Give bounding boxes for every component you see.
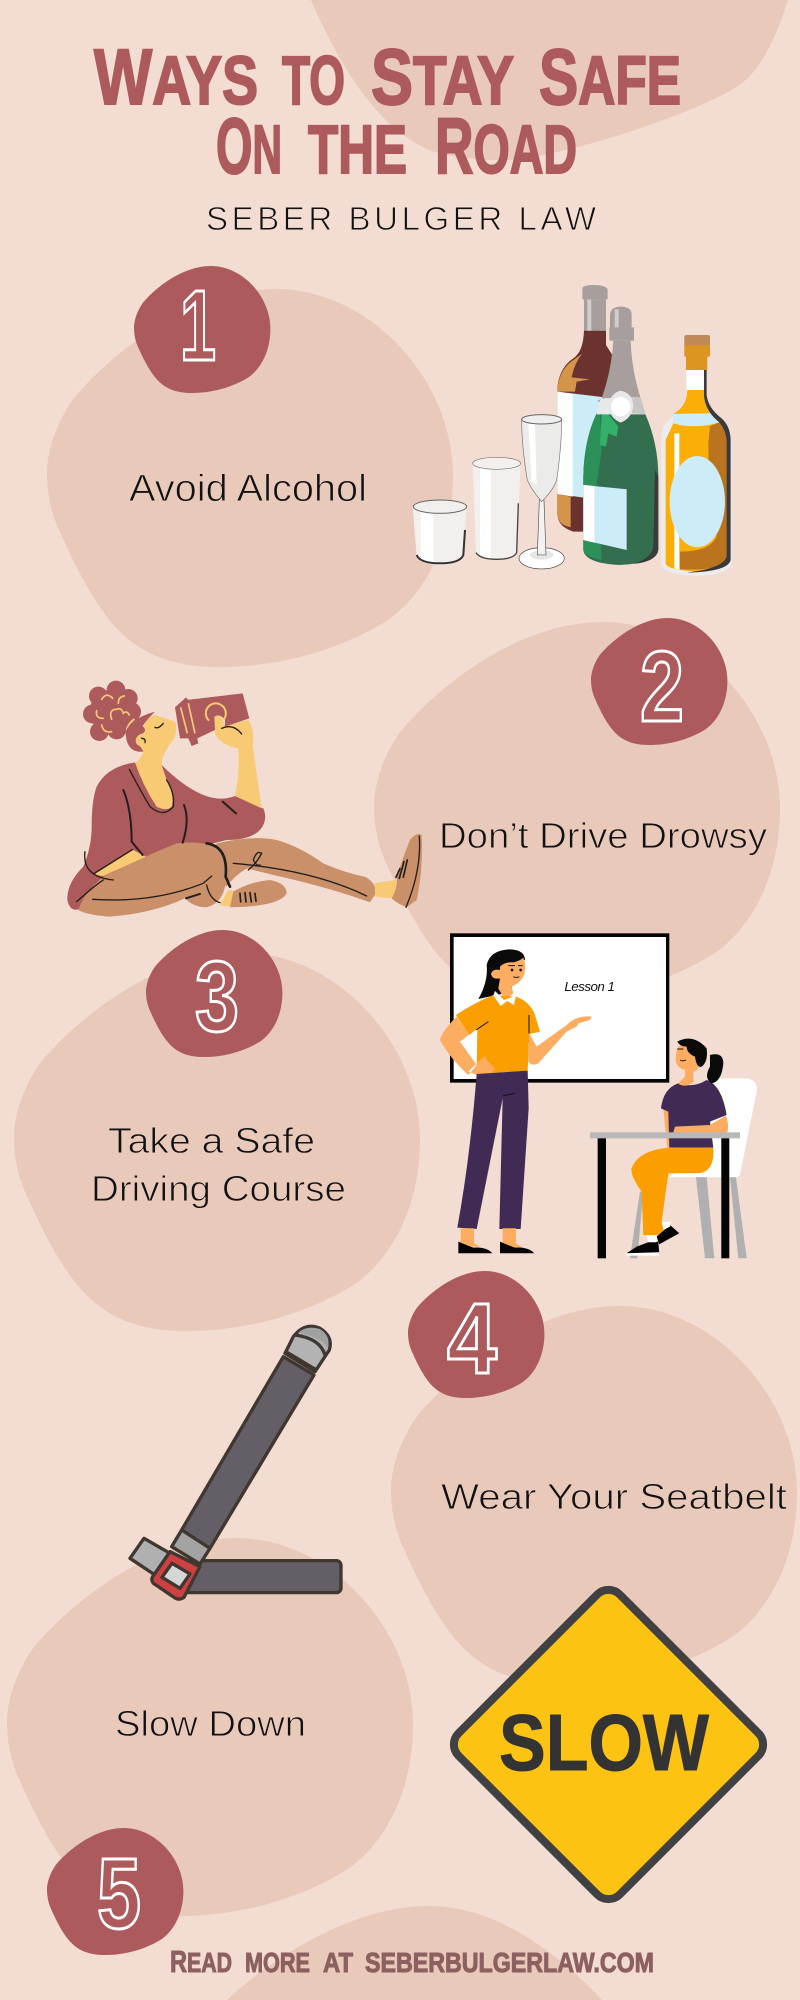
title: THE xyxy=(308,111,407,188)
skin at waist xyxy=(93,850,146,876)
badge: number 1: 1 xyxy=(180,270,216,382)
front hair xyxy=(126,712,155,752)
background blob: step 5 xyxy=(7,1538,413,1916)
arm and hand xyxy=(214,716,262,808)
tall glass xyxy=(473,457,521,560)
shirt xyxy=(67,762,265,910)
subtitle: SEBER BULGER LAW xyxy=(206,200,597,237)
illustration: bottles and glasses xyxy=(413,285,732,576)
wine bottle xyxy=(557,285,613,532)
ear xyxy=(136,735,147,746)
whiteboard xyxy=(450,933,669,1083)
title: WAYS xyxy=(94,32,258,121)
badge: number 2: 2 xyxy=(640,631,684,743)
student xyxy=(625,1039,728,1256)
background blob: step 4 xyxy=(391,1306,797,1684)
whiteboard: Lesson 1 xyxy=(564,979,615,994)
background blob: top xyxy=(311,0,788,160)
illustration: slow road sign xyxy=(447,1583,770,1906)
hair bun xyxy=(83,681,141,741)
metal latch xyxy=(172,1530,210,1564)
amber bottle xyxy=(661,335,732,576)
badge: number 1 xyxy=(134,266,270,393)
coffee cup xyxy=(175,693,249,746)
buckle tab xyxy=(130,1538,170,1575)
badge: number 5 xyxy=(47,1828,183,1955)
illustration: teacher and student in classroom xyxy=(440,933,757,1258)
background blob: step 2 xyxy=(374,622,780,1000)
strap top cap xyxy=(285,1326,330,1372)
footer call to action: MORE xyxy=(245,1947,310,1978)
background blob: step 1 xyxy=(47,289,453,667)
background blob: bottom xyxy=(227,1906,602,2000)
title: SAFE xyxy=(539,32,681,121)
title xyxy=(94,32,681,190)
footer call to action: READ xyxy=(170,1944,232,1979)
teacher xyxy=(440,949,592,1253)
step 2 text: Don’t Drive Drowsy xyxy=(439,815,767,856)
badge: number 4: 4 xyxy=(447,1283,497,1395)
step 4 text: Wear Your Seatbelt xyxy=(441,1476,787,1517)
badge: number 2 xyxy=(591,618,727,745)
footer call to action xyxy=(170,1944,654,1979)
title: TO xyxy=(282,42,345,119)
ankles xyxy=(220,880,397,907)
chair xyxy=(630,1078,757,1258)
short glass xyxy=(413,500,467,565)
lap strap xyxy=(185,1561,341,1593)
footer call to action: AT xyxy=(323,1947,353,1978)
face and chest xyxy=(135,715,176,809)
red buckle xyxy=(152,1552,200,1599)
background blob: step 3 xyxy=(14,953,420,1331)
step 3 text: Take a Safe xyxy=(108,1120,315,1161)
illustration: slow road sign: SLOW xyxy=(499,1698,709,1787)
curl lines xyxy=(96,695,129,732)
desk xyxy=(590,1132,740,1258)
footer call to action: SEBERBULGERLAW.COM xyxy=(365,1947,654,1978)
illustration: woman drinking coffee xyxy=(67,681,422,917)
badge: number 5: 5 xyxy=(97,1838,141,1950)
badge: number 3 xyxy=(146,930,282,1057)
title: ROAD xyxy=(435,101,577,190)
flute glass xyxy=(519,415,564,569)
step 3 text line 2: Driving Course xyxy=(91,1168,346,1209)
title: ON xyxy=(216,101,282,190)
line details xyxy=(77,723,420,907)
curl near face xyxy=(127,719,134,727)
badge: number 3: 3 xyxy=(195,941,239,1053)
step 1 text: Avoid Alcohol xyxy=(129,468,367,510)
step 5 text: Slow Down xyxy=(115,1703,306,1744)
badge: number 4 xyxy=(408,1271,544,1398)
buckle window xyxy=(162,1563,190,1588)
shoulder strap xyxy=(182,1357,314,1548)
illustration: seatbelt xyxy=(130,1326,341,1599)
legs xyxy=(207,838,376,902)
shoes xyxy=(230,834,422,907)
title: STAY xyxy=(371,32,514,121)
champagne bottle xyxy=(583,307,658,565)
